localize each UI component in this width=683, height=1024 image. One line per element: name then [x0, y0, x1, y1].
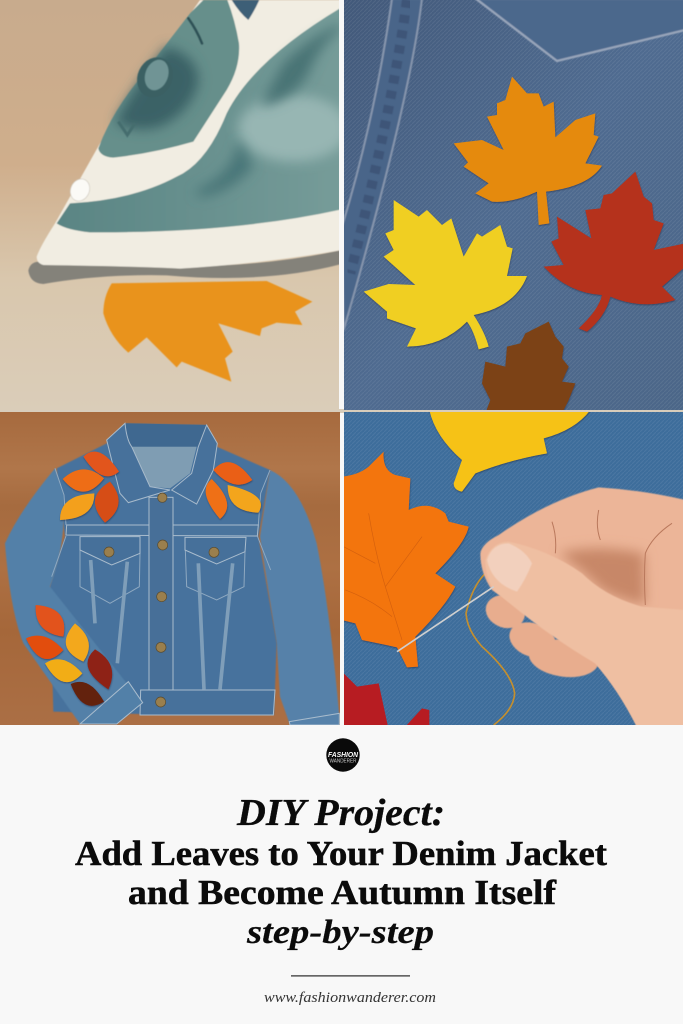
felt leaves on right shoulder [206, 462, 261, 519]
divider rule [291, 975, 410, 977]
thumbnail [487, 543, 532, 592]
felt leaves on left shoulder [60, 452, 119, 523]
jacket armhole and pocket seams [52, 468, 271, 603]
title: DIY Project: DIY Project: [236, 792, 445, 834]
felt leaf under iron [103, 281, 312, 382]
jacket collar right [172, 425, 217, 504]
panel: iron pressing felt leaf [0, 0, 348, 410]
iron upper control panel [98, 0, 239, 158]
jacket hem band [140, 690, 275, 715]
jacket buttons [104, 493, 219, 707]
title: line two: Add Leaves to Your Denim Jacket [75, 835, 608, 873]
hand [480, 487, 683, 727]
logo: Fashion Wanderer badge [326, 738, 360, 772]
thumb [485, 542, 683, 727]
jacket placket [149, 497, 173, 690]
iron top blue handle [232, 0, 259, 20]
panel: felt maple leaves on denim [342, 0, 683, 413]
jacket collar left [107, 423, 170, 503]
jacket torso [50, 423, 277, 715]
felt leaves on sleeve [26, 605, 112, 706]
denim placket seam [342, 0, 422, 330]
felt leaf: yellow [364, 200, 527, 349]
title: line three: and Become Autumn Itself [128, 874, 557, 912]
jacket pocket flap left [80, 537, 140, 565]
jacket back collar [125, 423, 207, 447]
red felt leaf [342, 672, 429, 727]
jacket left cuff [80, 682, 143, 724]
iron white body [37, 0, 342, 269]
jacket pocket flap right [185, 537, 246, 564]
jacket yoke seam [66, 525, 258, 536]
iron dial [136, 57, 169, 91]
logo: Fashion Wanderer badge: WANDERER [330, 758, 356, 764]
jacket vertical seams [91, 560, 233, 689]
jacket neck inner [130, 447, 197, 488]
subtitle: step-by-step: step-by-step [246, 914, 434, 951]
index finger and back of hand [480, 487, 683, 727]
finger creases [552, 510, 672, 605]
jacket right cuff [289, 713, 339, 725]
lower fingers [481, 590, 601, 681]
denim pocket edge [475, 0, 683, 61]
jacket right sleeve [260, 470, 339, 725]
orange felt leaf [342, 452, 469, 667]
needle [397, 587, 494, 652]
palm shadow [559, 548, 645, 605]
logo: Fashion Wanderer badge: FASHION [328, 750, 359, 759]
iron dark recess [260, 23, 342, 107]
iron green lower shell [57, 7, 342, 232]
jacket left sleeve [5, 468, 143, 724]
iron dome highlight [238, 95, 348, 162]
sewing thread [466, 573, 515, 725]
felt leaf: orange [454, 77, 602, 225]
iron nozzle mark [118, 122, 135, 135]
iron soleplate [28, 250, 342, 284]
orange leaf veins [344, 513, 422, 640]
iron slot [188, 18, 202, 43]
panel: hand sewing leaf onto denim [342, 410, 683, 727]
panel: finished denim jacket on wood [0, 412, 340, 725]
felt leaf: brown [482, 322, 575, 413]
felt leaf: red [544, 172, 683, 332]
website url: www.fashionwanderer.com [264, 990, 436, 1006]
yellow felt leaf [429, 410, 590, 492]
iron white button [70, 178, 90, 202]
